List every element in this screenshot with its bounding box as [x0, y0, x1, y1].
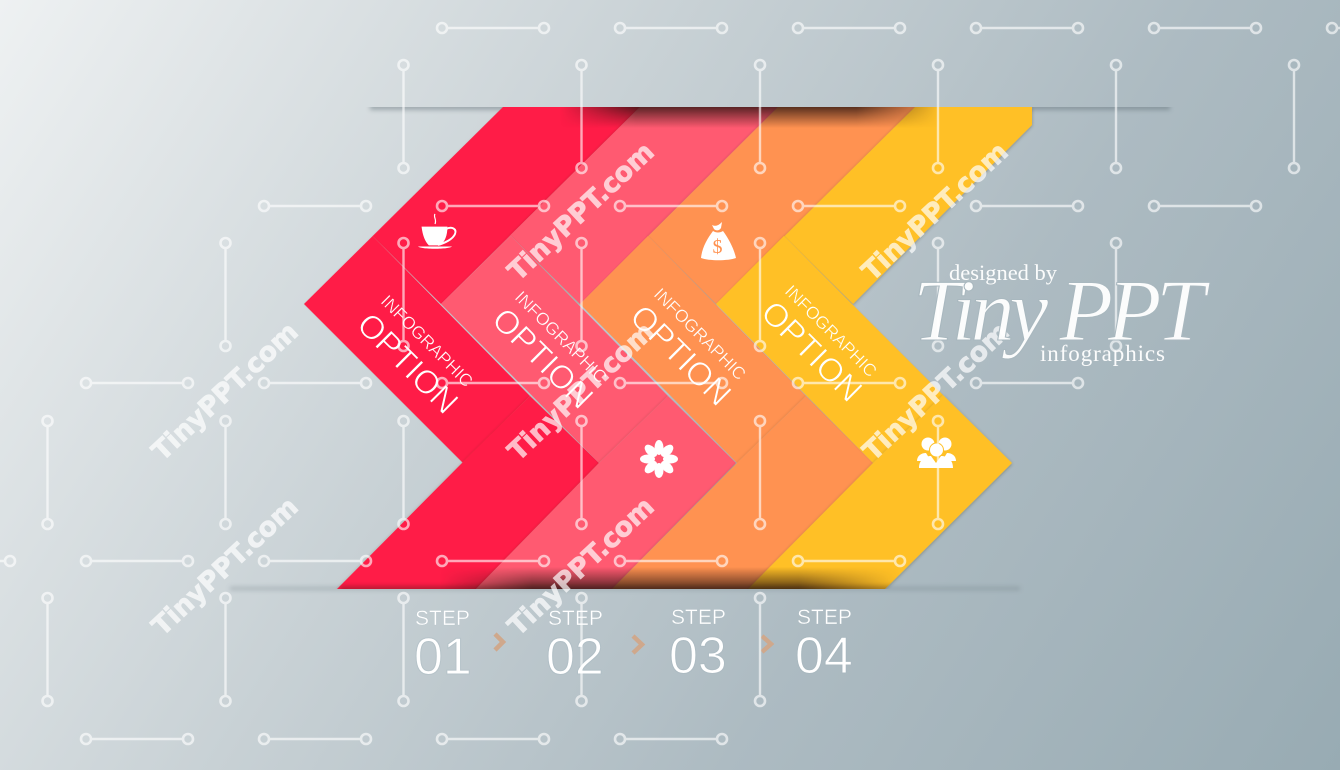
option label 3: INFOGRAPHIC	[650, 284, 750, 384]
arrow: step 2 to 3	[633, 636, 642, 653]
watermarks: TinyPPT.com	[502, 136, 660, 287]
step 01: 01	[414, 628, 472, 686]
step 04: 04	[795, 627, 853, 685]
step 01: STEP	[415, 607, 470, 630]
designer logo: infographics	[1040, 341, 1165, 366]
slit shadows on the background	[230, 103, 1170, 590]
icon: money bag: $	[712, 236, 722, 258]
designer logo: designed by	[949, 260, 1058, 285]
step 02: STEP	[548, 607, 603, 630]
chevron 1: red	[304, 107, 640, 589]
chevron 3: orange	[580, 107, 915, 589]
option label 1: OPTION	[350, 305, 466, 421]
watermarks	[146, 136, 1015, 642]
inner shadows at the slits	[340, 107, 980, 594]
arrow: step 1 to 2	[495, 634, 503, 650]
icon: flower	[640, 440, 678, 478]
chevron 2: pink	[441, 107, 778, 589]
option label 1: INFOGRAPHIC	[377, 291, 477, 391]
icon: people	[917, 438, 956, 468]
step 03: 03	[669, 627, 727, 685]
step 04: STEP	[797, 606, 852, 629]
step 03: STEP	[671, 606, 726, 629]
option labels	[350, 281, 881, 421]
step 02: 02	[546, 628, 604, 686]
option label 2: INFOGRAPHIC	[511, 287, 611, 387]
option label 3: OPTION	[623, 297, 739, 413]
chevron stack	[304, 107, 1032, 589]
option label 4: INFOGRAPHIC	[781, 281, 881, 381]
watermarks: TinyPPT.com	[502, 491, 660, 642]
icon: money bag	[701, 222, 736, 260]
designer logo: Tiny PPT	[913, 263, 1211, 360]
icon: coffee cup	[418, 214, 455, 249]
arrow: step 3 to 4	[762, 636, 771, 652]
chevron 4: yellow	[716, 107, 1032, 589]
option label 2: OPTION	[485, 300, 601, 416]
step labels	[414, 606, 853, 686]
watermarks: TinyPPT.com	[856, 136, 1014, 287]
watermarks: TinyPPT.com	[146, 491, 304, 642]
watermarks: TinyPPT.com	[146, 316, 304, 467]
watermarks: TinyPPT.com	[857, 316, 1015, 467]
option label 4: OPTION	[754, 293, 870, 409]
watermarks: TinyPPT.com	[502, 316, 660, 467]
